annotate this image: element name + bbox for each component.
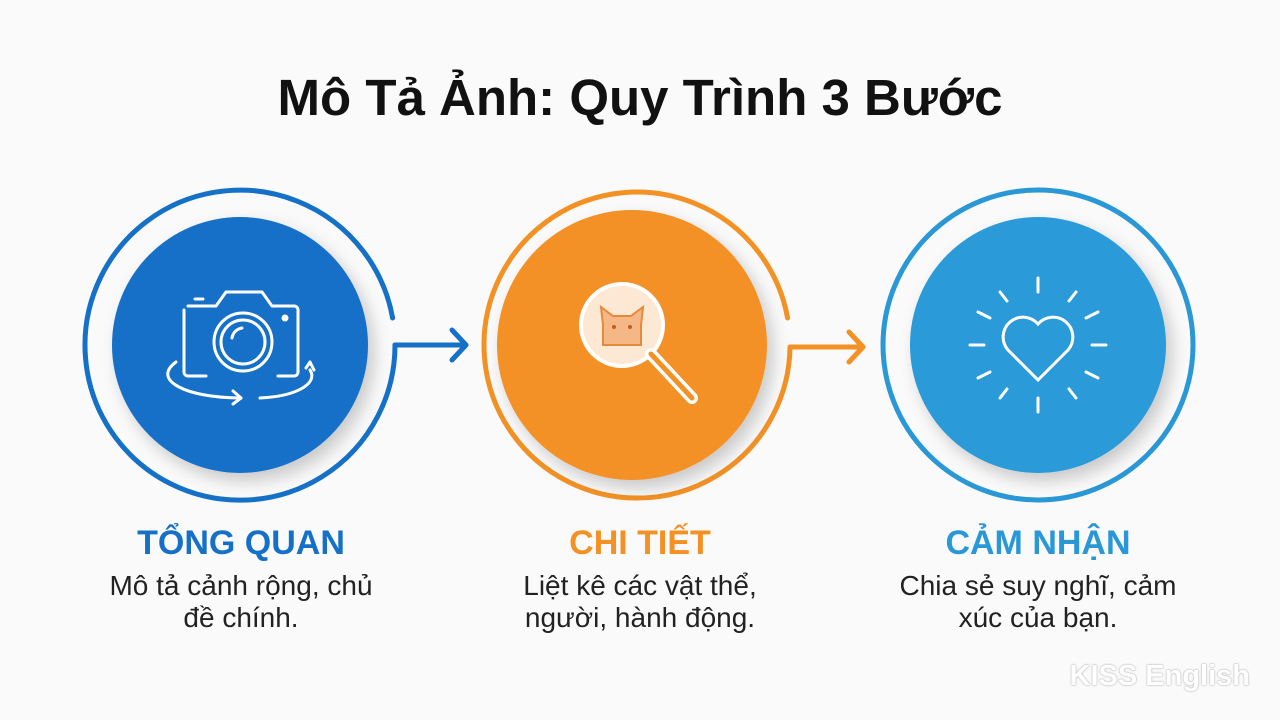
step 2 text xyxy=(523,570,757,633)
icon: magnifier with cat xyxy=(581,284,692,398)
step 1 text xyxy=(109,570,373,633)
step 2 heading: CHI TIẾT xyxy=(569,524,711,562)
arrow xyxy=(395,330,466,360)
icon: heart with rays xyxy=(970,278,1106,412)
step 3 circle xyxy=(883,190,1193,500)
step 1 heading: TỔNG QUAN xyxy=(137,524,345,562)
step 2 text: Liệt kê các vật thể, xyxy=(523,570,757,601)
step 1 circle xyxy=(85,190,466,500)
step 2 circle xyxy=(484,192,863,498)
step 3 text: xúc của bạn. xyxy=(959,602,1117,633)
step 1 text: đề chính. xyxy=(183,602,299,633)
step 2 text: người, hành động. xyxy=(525,602,755,633)
watermark: KISS English xyxy=(1070,660,1250,692)
title: Mô Tả Ảnh: Quy Trình 3 Bước xyxy=(278,69,1002,126)
icon: camera xyxy=(168,292,314,404)
step 3 heading: CẢM NHẬN xyxy=(945,524,1131,562)
step 3 text: Chia sẻ suy nghĩ, cảm xyxy=(899,570,1177,601)
step 3 text xyxy=(899,570,1177,633)
arrow xyxy=(790,332,863,362)
step 1 text: Mô tả cảnh rộng, chủ xyxy=(109,570,373,601)
